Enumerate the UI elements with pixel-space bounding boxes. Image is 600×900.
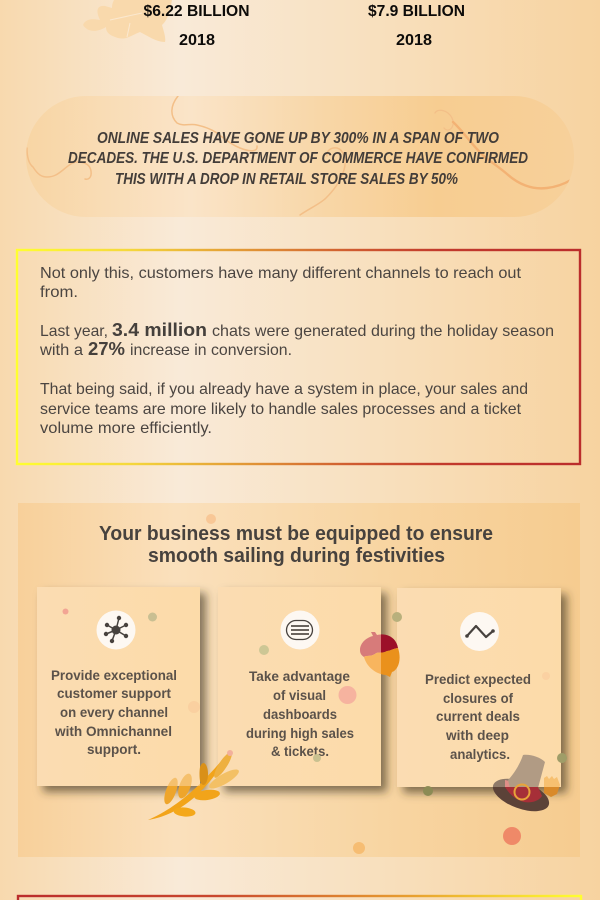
card text: & tickets. — [271, 744, 329, 759]
card text: analytics. — [450, 747, 510, 762]
card text — [51, 668, 177, 757]
panel: channels text box: 27% — [88, 339, 125, 359]
card text — [425, 672, 531, 762]
card 2: dashboards — [218, 587, 381, 786]
callout: online sales pill: DECADES. THE U.S. DEPARTMENT OF COMMERCE HAVE CONFIRMED — [68, 150, 528, 167]
card text: Provide exceptional — [51, 668, 177, 683]
panel: next section border — [18, 896, 581, 900]
callout: online sales pill: THIS WITH A DROP IN RETAIL STORE SALES BY 50% — [115, 171, 458, 188]
callout: online sales pill: ONLINE SALES HAVE GONE UP BY 300% IN A SPAN OF TWO — [97, 130, 499, 147]
heading: Your business must be equipped to ensure — [99, 522, 493, 545]
stat: 2018 left — [144, 3, 250, 49]
icon: dashboard list — [280, 610, 320, 650]
card text: Predict expected — [425, 672, 531, 687]
icon: autumn leaf — [83, 0, 172, 42]
card text: customer support — [57, 686, 171, 701]
panel: channels text box — [17, 250, 580, 464]
card text: of visual — [273, 688, 326, 703]
dot — [206, 514, 216, 524]
panel: channels text box: Last year, — [40, 323, 108, 340]
decorative vines — [27, 96, 571, 215]
stat: 2018 left: 2018 — [179, 32, 215, 49]
card text: Take advantage — [249, 669, 350, 684]
stat: 2018 right: $7.9 BILLION — [368, 3, 465, 20]
card text: dashboards — [263, 707, 337, 722]
stat: 2018 right — [368, 3, 465, 49]
panel: channels text box: Not only this, customers have many different channels to reach out — [40, 265, 522, 282]
panel: channels text box: That being said, if you already have a system in place, your sales and — [40, 381, 528, 398]
card 3: analytics — [397, 588, 561, 787]
icon: golden sprig — [148, 750, 241, 820]
dots: confetti — [62, 608, 567, 854]
icon: acorn — [360, 632, 400, 677]
card 1: omnichannel — [37, 587, 200, 786]
icon: trend line — [460, 612, 499, 651]
panel: channels text box: increase in conversion. — [130, 342, 292, 359]
card text: with deep — [445, 728, 509, 743]
panel: channels text box: 3.4 million — [112, 320, 207, 340]
card text: support. — [87, 742, 141, 757]
card text: during high sales — [246, 726, 354, 741]
callout: online sales pill — [26, 96, 574, 217]
card text: on every channel — [60, 705, 168, 720]
icon: omnichannel hub — [96, 610, 136, 650]
panel: channels text box: with a — [39, 342, 83, 359]
card text: closures of — [443, 691, 513, 706]
stat: 2018 right: 2018 — [396, 32, 432, 49]
panel: channels text box: service teams are more likely to handle sales processes and a ticket — [40, 401, 522, 418]
card text — [246, 669, 354, 759]
stat: 2018 left: $6.22 BILLION — [144, 3, 250, 20]
panel: channels text box: from. — [40, 284, 78, 301]
panel: channels text box: volume more efficiently. — [40, 420, 212, 437]
card text: with Omnichannel — [54, 724, 172, 739]
panel: channels text box: chats were generated during the holiday season — [212, 323, 554, 340]
card text: current deals — [436, 709, 520, 724]
heading: smooth sailing during festivities — [148, 544, 445, 567]
icon: pilgrim hat — [492, 754, 560, 812]
heading — [99, 522, 493, 567]
panel: business equipped section — [18, 503, 580, 857]
